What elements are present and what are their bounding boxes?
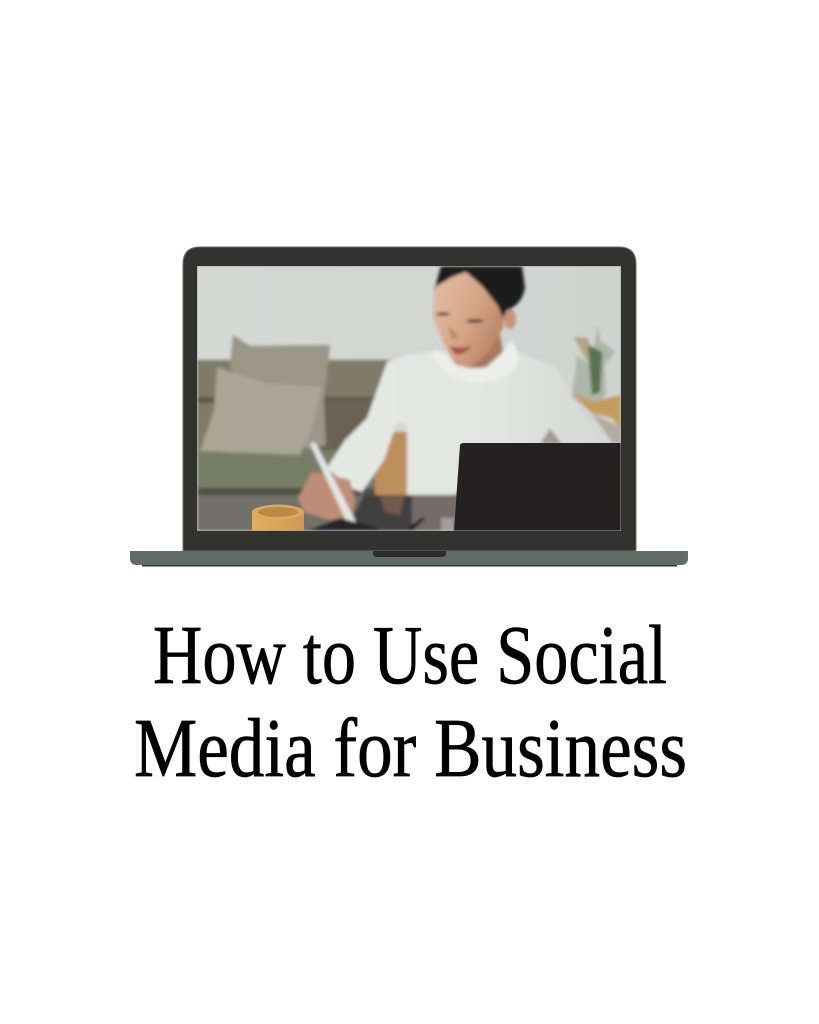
face [433, 266, 505, 367]
gap by right arm [540, 428, 562, 444]
back pillow [230, 335, 330, 449]
screen edge [197, 266, 621, 531]
front pillow [200, 367, 322, 455]
laptop lid bezel [183, 247, 636, 551]
laptop notch [373, 551, 446, 557]
screen photo: woman working at a desk [197, 266, 621, 531]
desk [198, 493, 456, 530]
base underside shadow [142, 565, 677, 566]
turtleneck collar [434, 340, 518, 380]
eyes [436, 312, 484, 323]
hand [298, 472, 355, 520]
smile [449, 346, 472, 354]
shelf behind arm [592, 413, 621, 443]
plant [572, 325, 615, 410]
closed laptop in photo [454, 443, 621, 531]
ear [504, 309, 516, 329]
hair [434, 266, 525, 318]
laptop illustration [130, 247, 688, 566]
nose shadow [448, 326, 459, 340]
pen [310, 442, 357, 529]
sweater [326, 352, 574, 498]
sofa [197, 360, 392, 496]
rattan chair [375, 432, 409, 496]
coffee cup [252, 504, 304, 531]
laptop base [130, 551, 688, 565]
wall [197, 266, 621, 531]
title line 1: How to Use Social [153, 609, 667, 702]
wicker basket [572, 390, 621, 430]
neck shadow [448, 335, 503, 368]
tablet [306, 518, 378, 531]
title [134, 609, 687, 795]
title line 2: Media for Business [134, 702, 687, 795]
